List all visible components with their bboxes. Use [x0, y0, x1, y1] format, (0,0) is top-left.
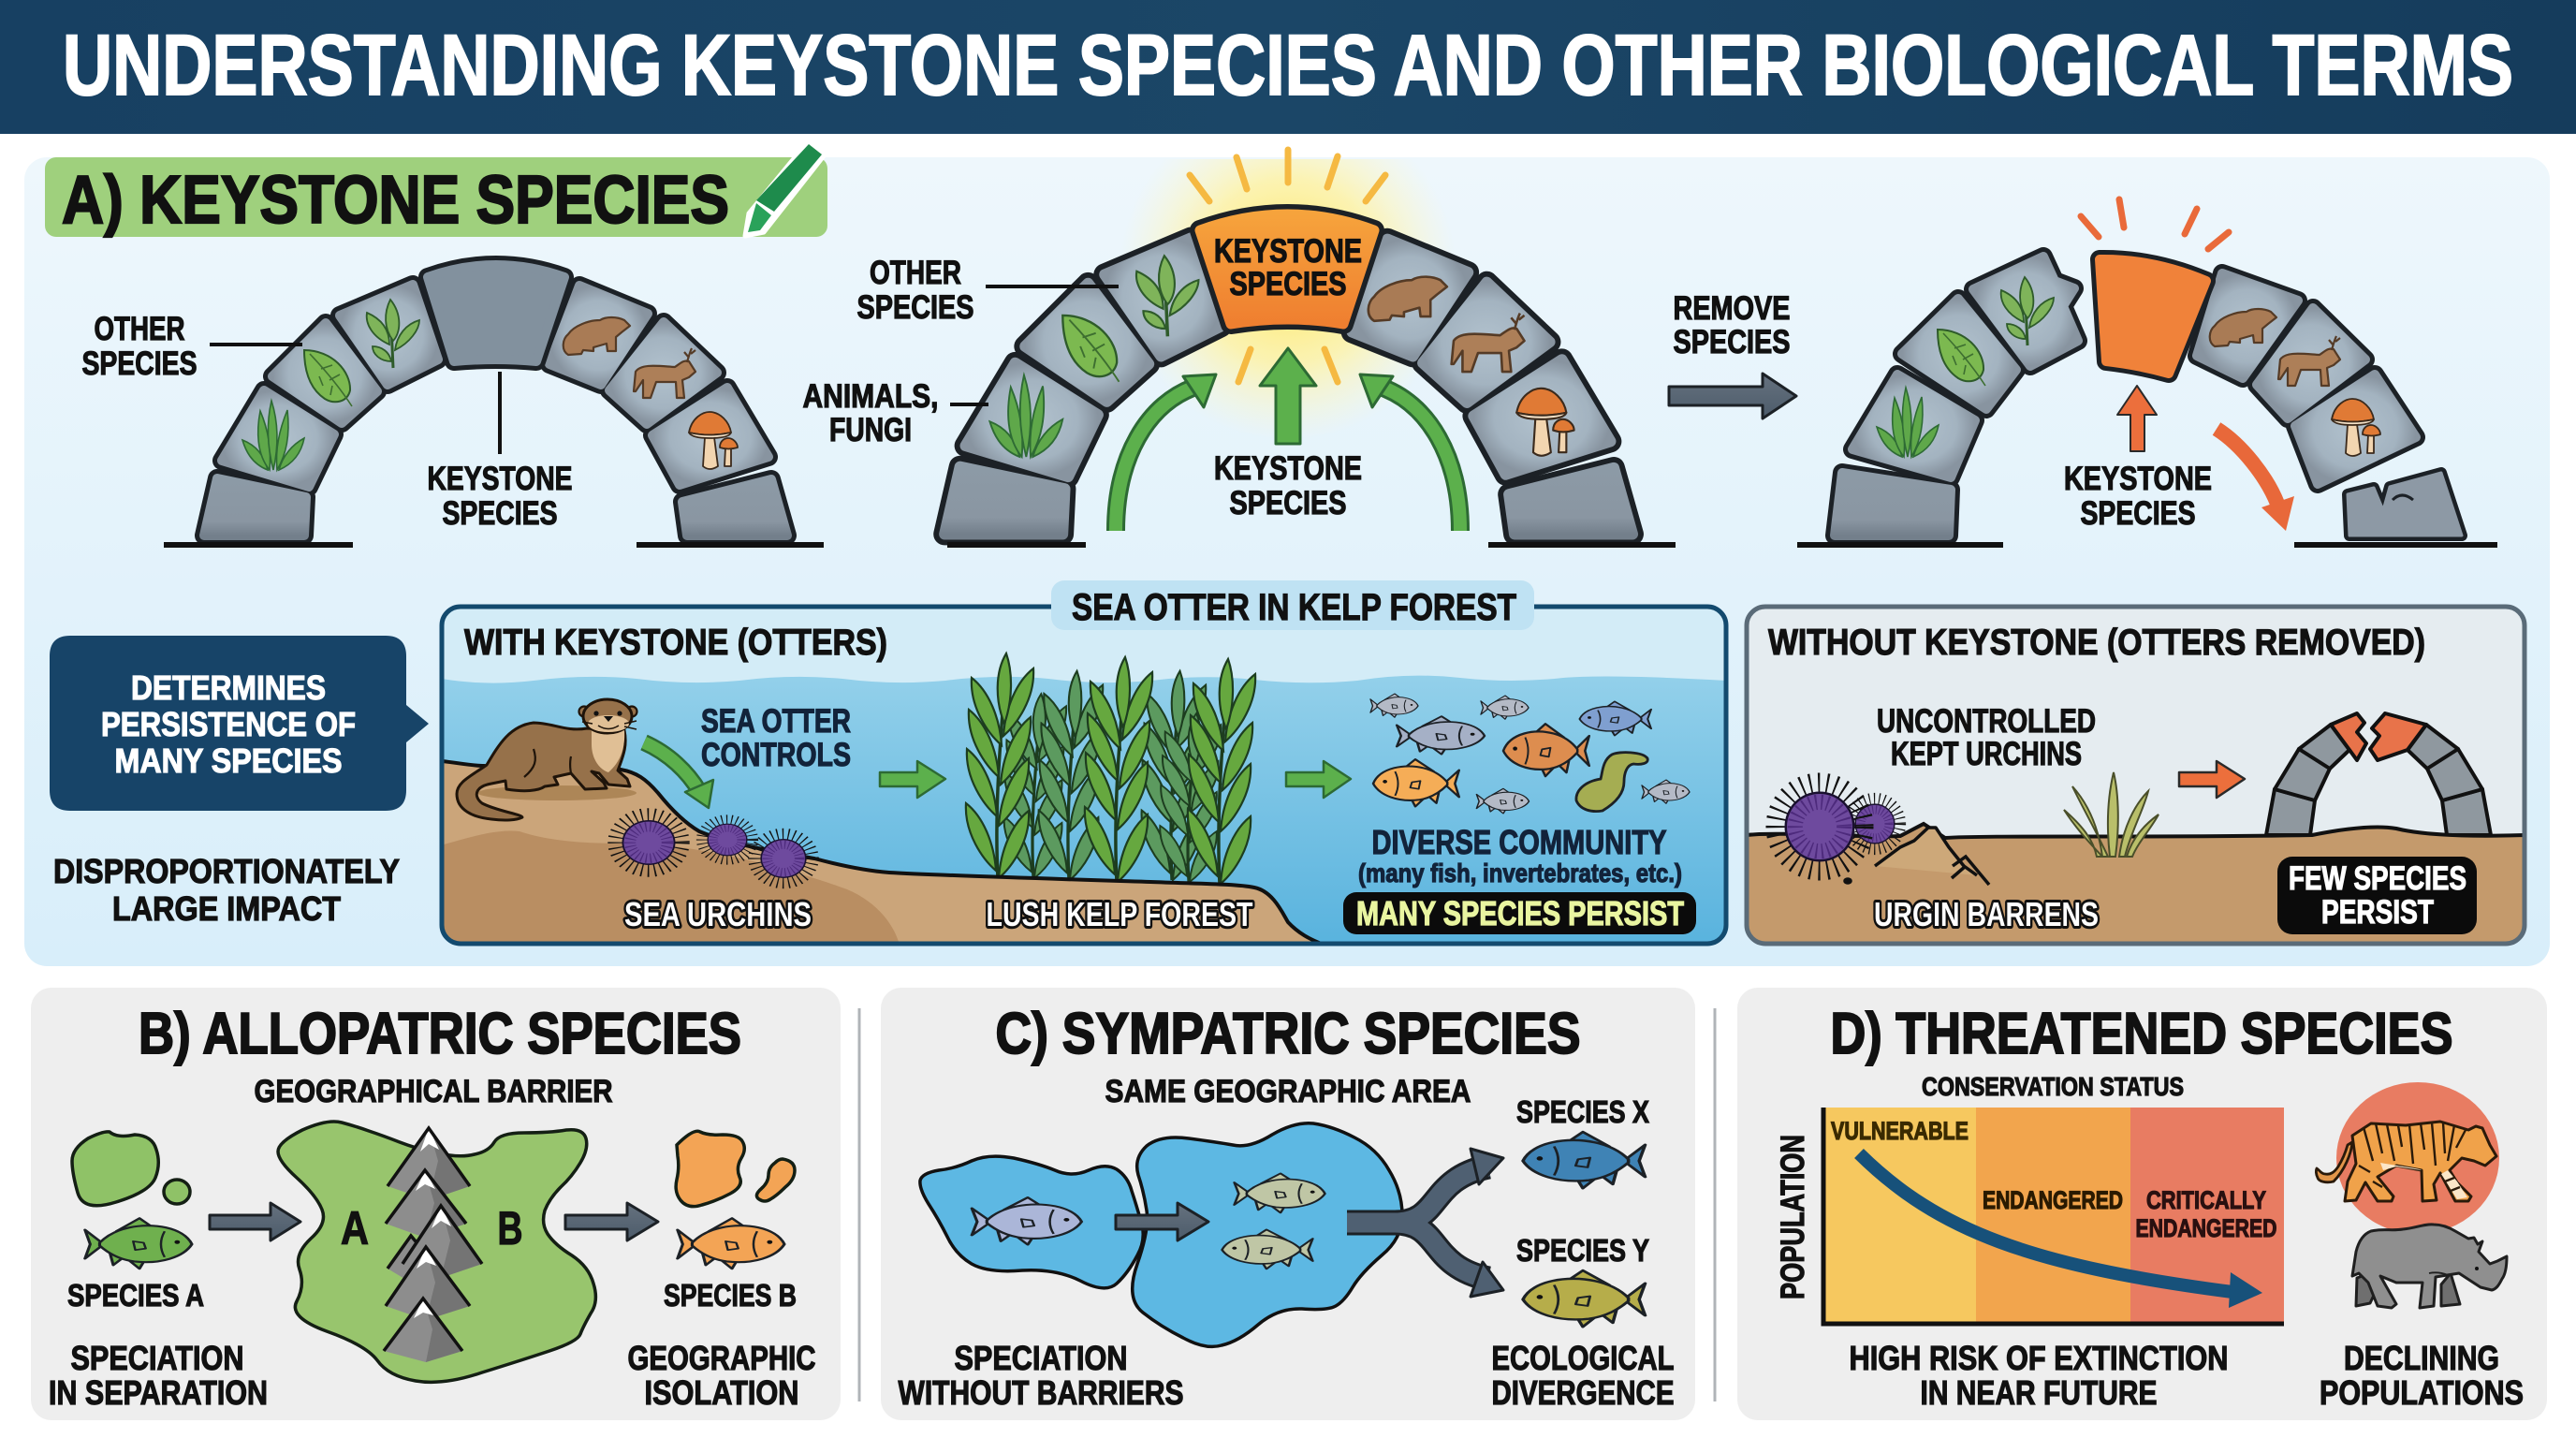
icon: tiger — [2316, 1122, 2496, 1201]
icon: dead grass — [2064, 772, 2159, 857]
label: sea otter controls: SEA OTTER — [701, 703, 851, 740]
label: declining populations: POPULATIONS — [2320, 1373, 2524, 1412]
panel: D threatened species — [1737, 988, 2547, 1420]
label: keystone species — [2064, 461, 2212, 532]
chart: conservation status decline: ENDANGERED — [2136, 1214, 2276, 1242]
diagram: collapsing arch without keystone — [1797, 199, 2497, 545]
arrow: to species B — [565, 1203, 658, 1240]
label: speciation without barriers: WITHOUT BARRIERS — [899, 1373, 1183, 1412]
label: keystone species — [1214, 450, 1362, 521]
diagram: arch with highlighted keystone — [803, 103, 1676, 545]
badge: few species persist: FEW SPECIES — [2289, 860, 2466, 897]
icon: fish in right pool — [1222, 1173, 1325, 1269]
icon: small broken arch — [2266, 713, 2491, 835]
stone: orange keystone dropped — [2100, 259, 2206, 374]
label: remove species — [1674, 290, 1790, 360]
label: conservation status: CONSERVATION STATUS — [1922, 1072, 2184, 1101]
arrow: to right pool — [1116, 1203, 1208, 1240]
arrow: green right curve — [1360, 374, 1460, 531]
text: diverse community: DIVERSE COMMUNITY — [1372, 823, 1666, 861]
label: geographic isolation — [627, 1339, 816, 1412]
label: uncontrolled kept urchins: KEPT URCHINS — [1891, 736, 2082, 772]
chart: conservation status decline: VULNERABLE — [1831, 1117, 1969, 1145]
label: high risk of extinction — [1850, 1339, 2228, 1412]
label: species A: SPECIES A — [67, 1278, 204, 1313]
icon: green pencil — [745, 140, 826, 236]
icon: urchins — [1778, 785, 1899, 869]
label: other species — [82, 311, 197, 382]
heading: C: C) SYMPATRIC SPECIES — [996, 1002, 1580, 1066]
panel: A keystone species — [24, 103, 2550, 966]
callout: determines persistence: MANY SPECIES — [114, 741, 343, 780]
arrow: to kelp — [880, 761, 945, 798]
label: speciation without barriers: SPECIATION — [955, 1339, 1127, 1377]
map: right pool — [1133, 1123, 1402, 1346]
label: species X: SPECIES X — [1516, 1094, 1649, 1129]
text: disproportionately large impact: LARGE IMPACT — [112, 889, 341, 928]
title bar — [0, 0, 2576, 134]
heading: B: B) ALLOPATRIC SPECIES — [139, 1002, 741, 1066]
badge: few species persist — [2277, 857, 2477, 934]
label: A: A — [341, 1202, 369, 1255]
label: other species: OTHER — [870, 255, 961, 291]
arrow: green center up — [1260, 348, 1316, 444]
icon: fish orange — [678, 1218, 784, 1269]
label: other species — [857, 255, 973, 326]
label: high risk of extinction: HIGH RISK OF EXTINCTION — [1850, 1339, 2228, 1377]
label: animals, fungi — [803, 378, 938, 448]
label: sea otter controls: CONTROLS — [701, 737, 851, 773]
callout: determines persistence — [50, 636, 429, 811]
label: geographic isolation: GEOGRAPHIC — [627, 1339, 816, 1377]
badge: few species persist: PERSIST — [2321, 894, 2434, 931]
keystone stone orange — [1200, 214, 1374, 324]
badge: many species persist: MANY SPECIES PERSIST — [1356, 894, 1684, 932]
seabed — [1747, 824, 2525, 944]
diagram: intact arch with empty keystone — [82, 265, 824, 545]
text: disproportionately large impact — [53, 852, 400, 928]
arrow: orange up — [2117, 386, 2157, 451]
icon: fish in left pool — [972, 1197, 1082, 1244]
seabed — [442, 761, 1321, 944]
label: uncontrolled kept urchins: UNCONTROLLED — [1877, 703, 2096, 740]
icon: sea otter — [457, 699, 637, 820]
label: keystone species: SPECIES — [2080, 495, 2196, 532]
arrow: green left curve — [1116, 374, 1216, 531]
label: remove species: SPECIES — [1674, 324, 1790, 360]
label: speciation in separation: SPECIATION — [71, 1339, 243, 1377]
keystone stone orange: KEYSTONE — [1214, 233, 1362, 270]
icon: rubble mound — [1845, 828, 1989, 885]
label: sea urchins: SEA URCHINS — [624, 895, 812, 933]
label: sea otter controls — [701, 703, 851, 773]
label: species B: SPECIES B — [664, 1278, 797, 1313]
label: other species: OTHER — [94, 311, 185, 347]
label: declining populations: DECLINING — [2344, 1339, 2499, 1377]
label: keystone species: SPECIES — [442, 495, 558, 532]
label: speciation in separation: IN SEPARATION — [49, 1373, 268, 1412]
panel: with keystone otters — [442, 607, 1726, 944]
label: declining populations — [2320, 1339, 2524, 1412]
arrow: to fish — [1286, 761, 1351, 798]
heading: without keystone: WITHOUT KEYSTONE (OTTERS REMOVED) — [1768, 623, 2425, 663]
label: population axis: POPULATION — [1775, 1135, 1811, 1299]
chart: conservation status decline: ENDANGERED — [1983, 1186, 2123, 1214]
panel: without keystone — [1747, 607, 2525, 944]
label: speciation without barriers — [899, 1339, 1183, 1412]
panel: C sympatric species — [881, 988, 1695, 1420]
arrow: branching divergence — [1347, 1149, 1503, 1297]
heading: D: D) THREATENED SPECIES — [1831, 1002, 2452, 1066]
map: left pool — [920, 1156, 1143, 1288]
label: high risk of extinction: IN NEAR FUTURE — [1921, 1373, 2157, 1412]
label: keystone species: KEYSTONE — [2064, 461, 2212, 497]
arrow: to barrier map — [210, 1203, 300, 1240]
text: diverse community: (many fish, invertebrates, etc.) — [1358, 858, 1682, 888]
label: species Y: SPECIES Y — [1516, 1233, 1649, 1268]
label: ecological divergence — [1492, 1339, 1674, 1412]
arrow: otter to urchins — [644, 742, 713, 808]
arrow: to few species — [2179, 761, 2245, 798]
label: lush kelp forest: LUSH KELP FOREST — [987, 895, 1253, 933]
label: animals, fungi: FUNGI — [829, 412, 912, 448]
arrow: orange down curve — [2217, 429, 2294, 531]
icon: sea urchins — [617, 815, 812, 882]
label: other species: SPECIES — [857, 289, 973, 326]
label: same geographic area: SAME GEOGRAPHIC AREA — [1105, 1074, 1471, 1109]
heading: A) keystone species: A) KEYSTONE SPECIES — [62, 163, 729, 238]
map: species B range — [676, 1131, 795, 1207]
chart: conservation status decline: CRITICALLY — [2146, 1186, 2266, 1214]
callout: determines persistence: PERSISTENCE OF — [101, 705, 356, 743]
label: other species: SPECIES — [82, 345, 197, 382]
map: divided range — [278, 1122, 595, 1382]
icon: red circle backdrop — [2336, 1082, 2499, 1234]
label: geographical barrier: GEOGRAPHICAL BARRIER — [255, 1074, 612, 1109]
label: geographic isolation: ISOLATION — [644, 1373, 799, 1412]
icon: mountain range — [384, 1128, 482, 1362]
label: keystone species: KEYSTONE — [427, 461, 573, 497]
label: ecological divergence: ECOLOGICAL — [1492, 1339, 1674, 1377]
text: diverse community — [1358, 823, 1682, 888]
map: species A range — [72, 1132, 190, 1206]
icon: fish community — [1370, 694, 1690, 814]
label: animals, fungi: ANIMALS, — [803, 378, 938, 415]
kelp forest — [966, 653, 1255, 884]
callout: determines persistence: DETERMINES — [131, 668, 326, 707]
label: keystone species: KEYSTONE — [1214, 450, 1362, 487]
keystone stone orange: SPECIES — [1230, 266, 1346, 302]
icon: fish X — [1523, 1132, 1646, 1188]
arrow: remove — [1669, 374, 1796, 418]
text: disproportionately large impact: DISPROPORTIONATELY — [53, 852, 400, 890]
label: B: B — [498, 1202, 522, 1255]
heading: with keystone: WITH KEYSTONE (OTTERS) — [464, 623, 887, 663]
panel: B allopatric species — [31, 988, 841, 1420]
label: keystone species — [427, 461, 573, 532]
label: remove species: REMOVE — [1674, 290, 1790, 327]
chart: conservation status decline — [1823, 1108, 2284, 1324]
label: keystone species: SPECIES — [1230, 485, 1346, 521]
icon: fish Y — [1523, 1270, 1646, 1327]
label: uncontrolled kept urchins — [1877, 703, 2096, 772]
label: ecological divergence: DIVERGENCE — [1492, 1373, 1674, 1412]
label: sea otter in kelp forest: SEA OTTER IN KELP FOREST — [1072, 587, 1516, 628]
icon: rhino — [2352, 1225, 2507, 1308]
keystone stone gray — [428, 265, 564, 361]
icon: fish green — [85, 1218, 192, 1269]
label: speciation in separation — [49, 1339, 268, 1412]
label: urgin barrens: URGIN BARRENS — [1874, 895, 2099, 933]
